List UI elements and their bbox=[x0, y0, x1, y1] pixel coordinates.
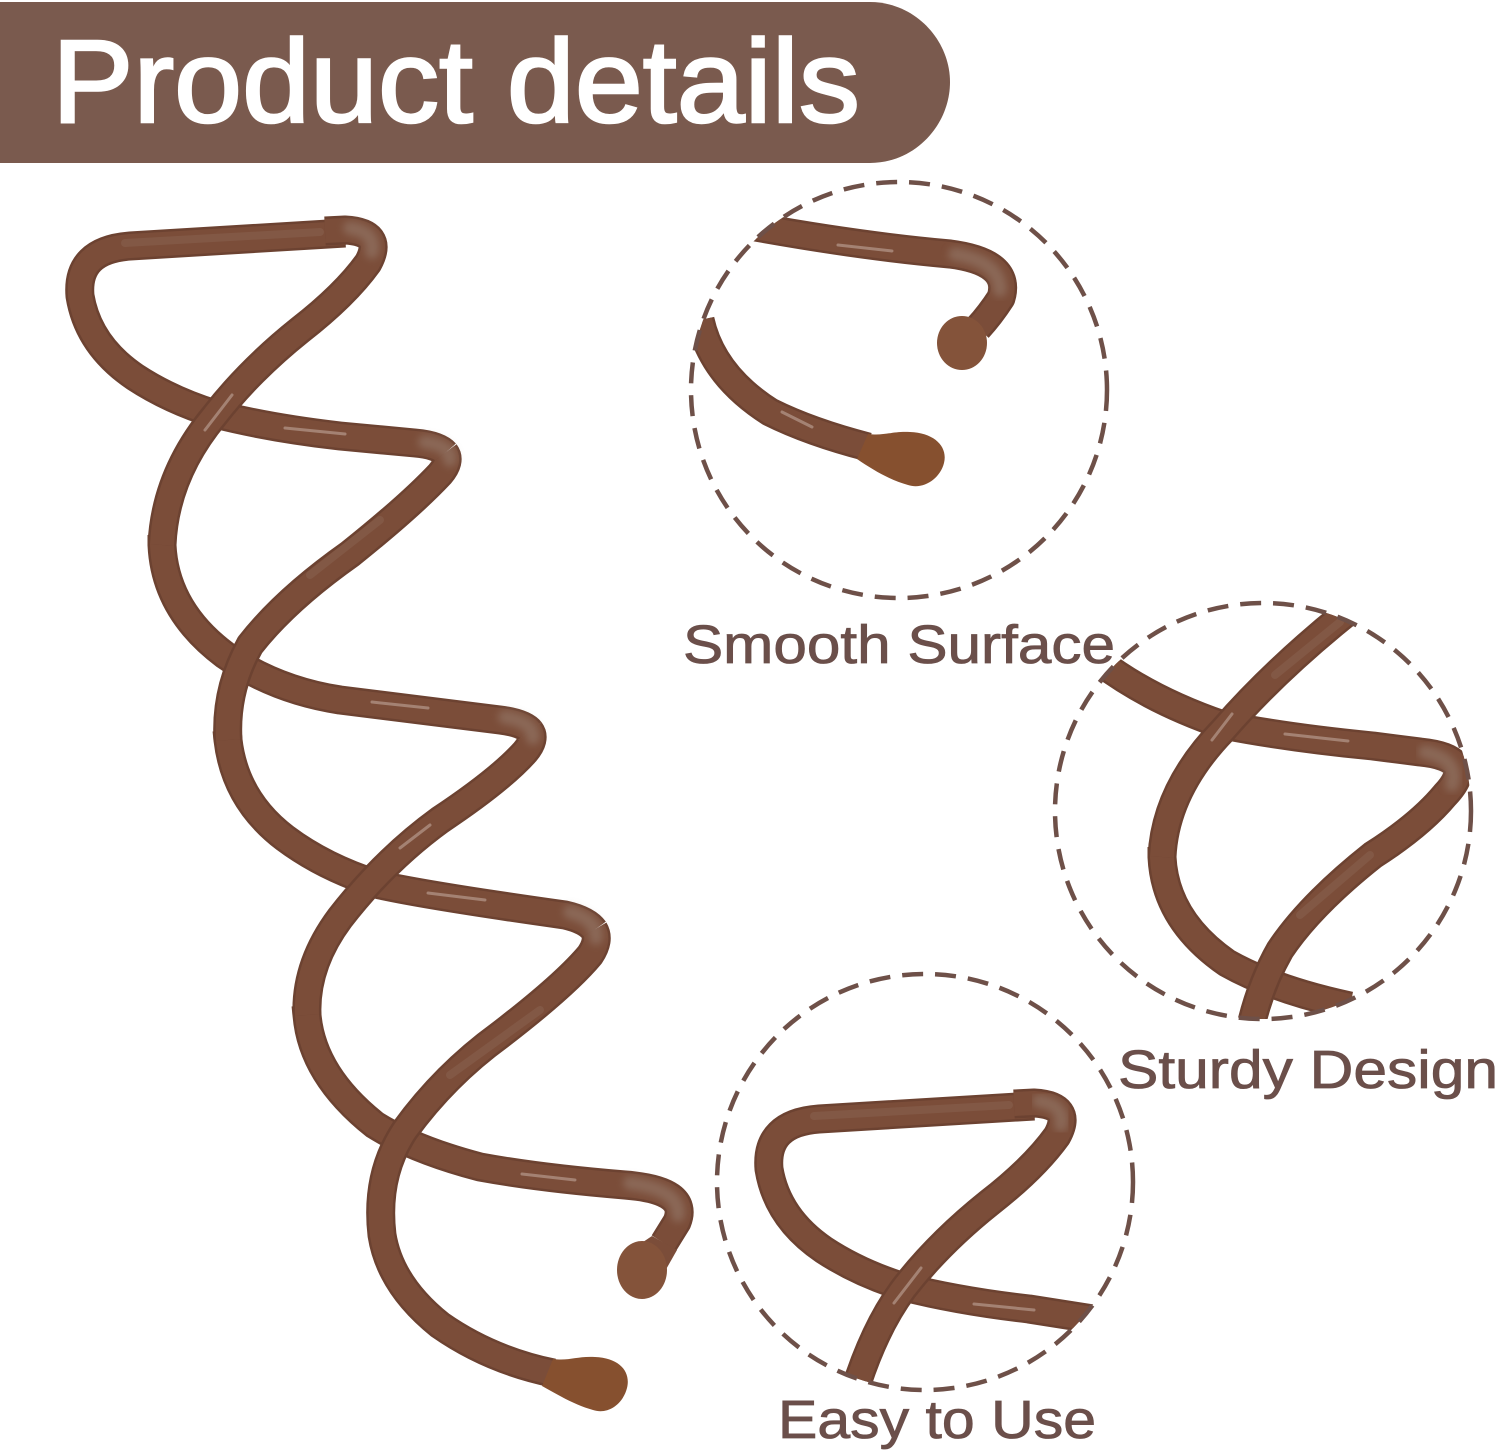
inset circle: sturdy design bbox=[1055, 603, 1471, 1030]
header banner bbox=[0, 2, 950, 163]
inset circle: smooth surface bbox=[691, 182, 1107, 598]
main spiral hair pin bbox=[80, 228, 679, 1411]
pin ball tip neck bbox=[628, 1236, 677, 1280]
label: smooth surface: Smooth Surface bbox=[683, 615, 1115, 675]
title: Product details bbox=[52, 16, 860, 148]
pin teardrop tip bbox=[542, 1357, 628, 1411]
inset circle: easy to use bbox=[717, 974, 1133, 1393]
label: easy to use: Easy to Use bbox=[778, 1390, 1096, 1450]
pin ball tip bbox=[617, 1241, 667, 1299]
label: sturdy design: Sturdy Design bbox=[1118, 1040, 1498, 1100]
